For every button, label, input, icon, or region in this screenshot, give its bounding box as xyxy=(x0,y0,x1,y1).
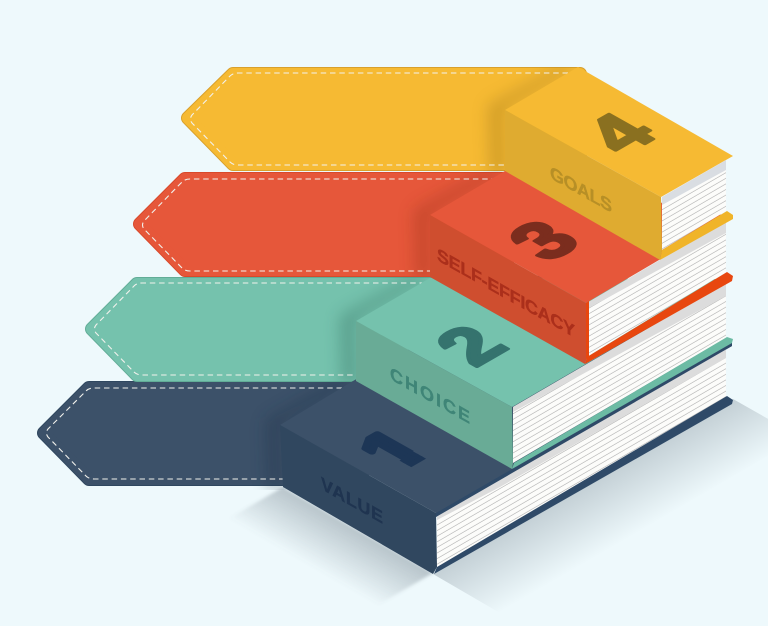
book 2 spine xyxy=(356,321,513,469)
label: CHOICE: CHOICE xyxy=(390,363,470,429)
book 4 spine xyxy=(505,110,662,260)
book 1 pages xyxy=(437,347,726,568)
book 3 spine xyxy=(430,215,587,364)
number 2: 2 xyxy=(416,315,524,376)
book 3 top cover xyxy=(430,171,732,303)
ground shadow right xyxy=(433,399,768,613)
book 2 top cover xyxy=(356,278,732,407)
label: GOALS: GOALS xyxy=(550,162,612,218)
book 4 top cover xyxy=(505,67,733,197)
book 1 bottom cover xyxy=(434,396,733,574)
number 1: 1 xyxy=(339,419,447,480)
book 1 cover edge xyxy=(436,342,732,517)
book 3 bottom cover xyxy=(585,272,733,364)
book 1 spine xyxy=(280,425,437,574)
book 2 bottom cover xyxy=(512,337,733,469)
book 1: value xyxy=(280,254,733,574)
book 2: choice xyxy=(356,278,733,469)
book 3 pages xyxy=(587,221,726,357)
ribbon 3: red xyxy=(140,168,507,280)
number 3: 3 xyxy=(489,210,597,271)
label: VALUE: VALUE xyxy=(321,473,383,529)
ribbon 2: teal xyxy=(92,274,432,385)
book 2 pages xyxy=(513,283,726,463)
book 4 pages xyxy=(662,160,726,250)
book 3 cover edge xyxy=(586,301,589,359)
label: SELF-EFFICACY: SELF-EFFICACY xyxy=(437,244,575,343)
number 4: 4 xyxy=(565,103,673,164)
ribbon 1: navy xyxy=(44,378,362,487)
book 4 bottom cover xyxy=(660,211,733,260)
book 4: goals xyxy=(505,67,733,260)
ribbon 4: yellow xyxy=(188,64,580,175)
ground shadow left xyxy=(228,487,433,605)
book 3: self-efficacy xyxy=(430,171,733,364)
book 1 top cover xyxy=(280,254,732,517)
